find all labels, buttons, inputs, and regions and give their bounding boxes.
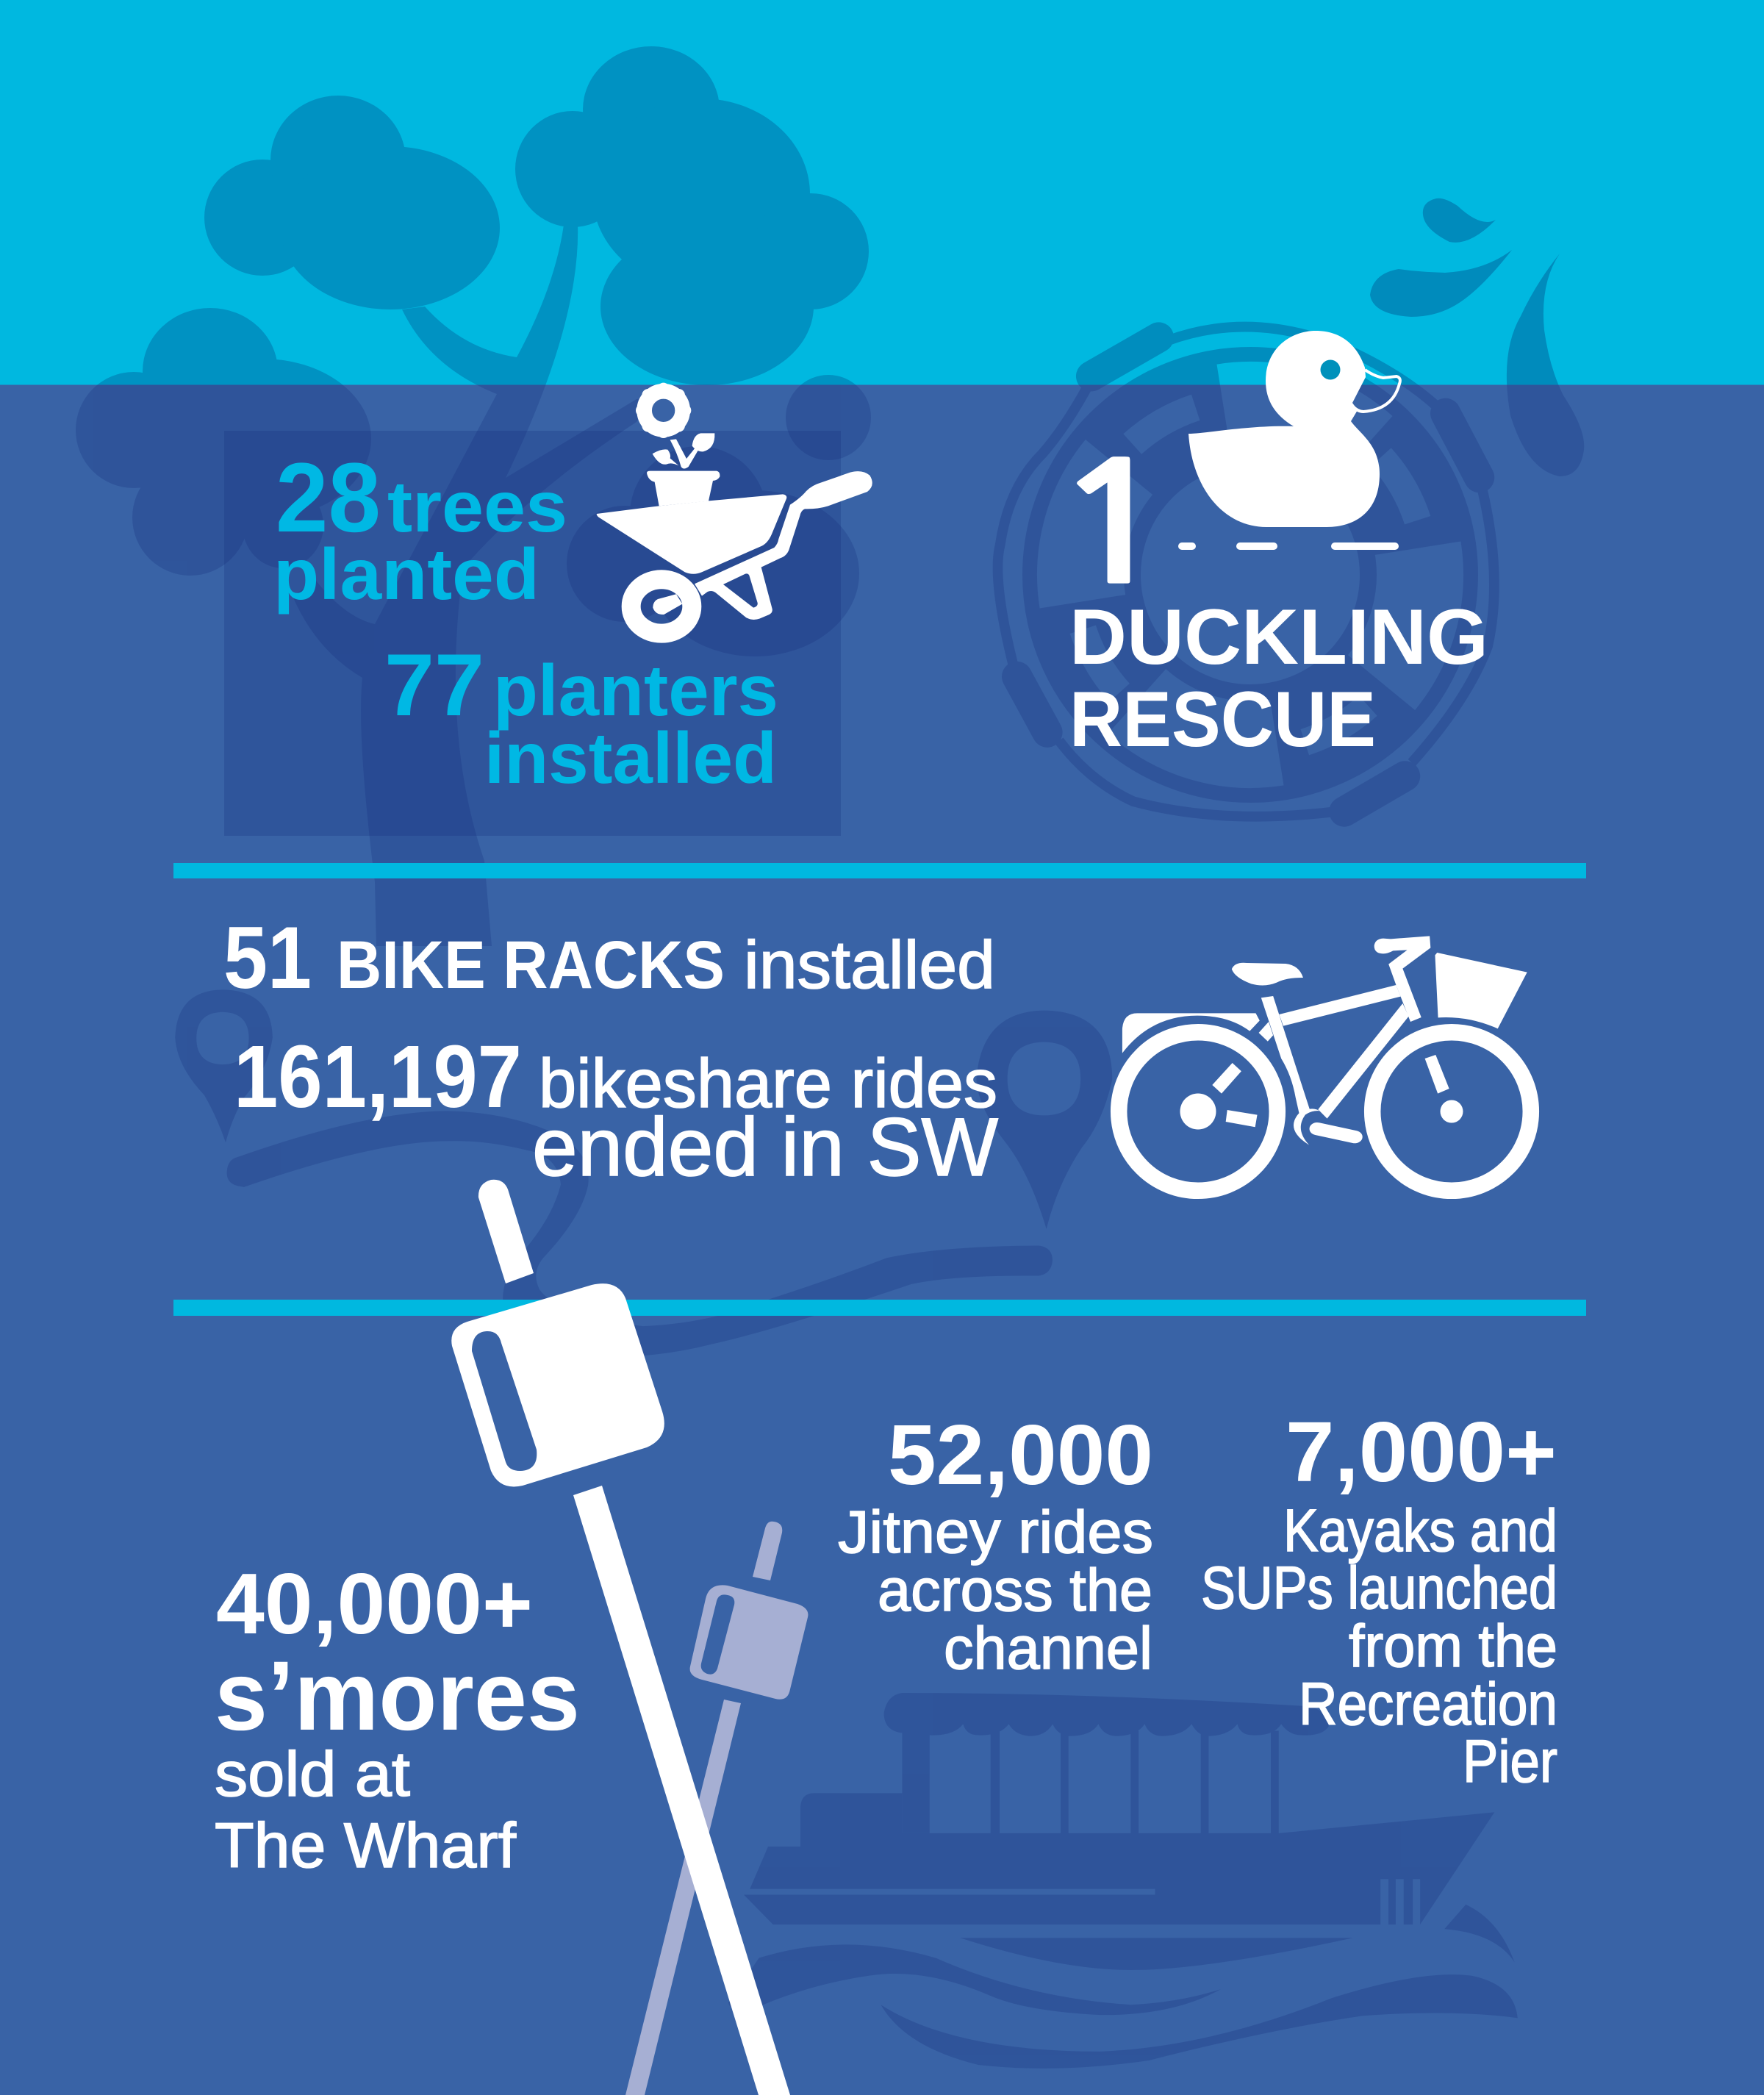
stat: 7,000+ kayaks and SUPs launched from the Recreation Pier: SUPs launched bbox=[1201, 1555, 1557, 1622]
stat: 77 planters installed bbox=[384, 636, 778, 798]
stat: 51 bike racks installed bbox=[223, 909, 995, 1007]
stat: 77 planters installed: planters bbox=[493, 650, 778, 731]
illustration: tree silhouette bbox=[76, 46, 871, 946]
divider: upper cyan bar bbox=[173, 863, 1586, 878]
stat: 28 trees planted: 28 bbox=[276, 443, 381, 553]
stat: 161,197 bikeshare rides ended in SW bbox=[234, 1026, 998, 1193]
stat: 51 bike racks installed: 51 bbox=[223, 909, 312, 1007]
stat: 7,000+ kayaks and SUPs launched from the Recreation Pier: Pier bbox=[1463, 1728, 1557, 1795]
stat: 161,197 bikeshare rides ended in SW: ended in SW bbox=[532, 1101, 998, 1193]
illustration: map pins and route silhouette bbox=[175, 989, 1112, 1358]
illustration: water splash drops bbox=[1370, 198, 1584, 476]
stat: 1 duckling rescue: RESCUE bbox=[1069, 675, 1376, 763]
background: cyan sky band bbox=[0, 0, 1764, 385]
stat: 52,000 Jitney rides across the channel: across the bbox=[878, 1557, 1152, 1624]
stat: 7,000+ kayaks and SUPs launched from the Recreation Pier: 7,000+ bbox=[1286, 1404, 1557, 1500]
stat: 51 bike racks installed: installed bbox=[744, 928, 995, 1003]
stat: 51 bike racks installed: BIKE RACKS bbox=[337, 928, 725, 1003]
stat: 1 duckling rescue bbox=[1050, 443, 1488, 763]
stat: 161,197 bikeshare rides ended in SW: 161,197 bbox=[234, 1026, 522, 1126]
stat: 161,197 bikeshare rides ended in SW: bikeshare rides bbox=[539, 1045, 997, 1122]
stat: 52,000 Jitney rides across the channel: Jitney rides bbox=[838, 1499, 1153, 1566]
stat: 7,000+ kayaks and SUPs launched from the Recreation Pier: Kayaks and bbox=[1283, 1497, 1557, 1564]
stat: 40,000+ s'mores sold at The Wharf: sold at bbox=[215, 1739, 410, 1810]
stat: 7,000+ kayaks and SUPs launched from the Recreation Pier bbox=[1201, 1404, 1557, 1795]
stat: 40,000+ s'mores sold at The Wharf: 40,000+ bbox=[216, 1555, 533, 1652]
stat: 7,000+ kayaks and SUPs launched from the Recreation Pier: from the bbox=[1349, 1613, 1557, 1680]
stat: 1 duckling rescue: 1 bbox=[1050, 443, 1178, 608]
stat: 1 duckling rescue: DUCKLING bbox=[1069, 592, 1488, 681]
stat: 28 trees planted: planted bbox=[273, 534, 539, 615]
icon: small marshmallow on stick bbox=[625, 1522, 808, 2095]
illustration: life ring silhouette bbox=[997, 327, 1494, 817]
stat: 28 trees planted: trees bbox=[387, 466, 567, 547]
illustration: jitney boat and waves silhouette bbox=[728, 1693, 1518, 2069]
stat: 40,000+ s'mores sold at The Wharf: s’mores bbox=[215, 1641, 580, 1751]
stat: 52,000 Jitney rides across the channel bbox=[838, 1407, 1153, 1682]
stat: 40,000+ s'mores sold at The Wharf bbox=[215, 1555, 580, 1881]
icon: large marshmallow on stick bbox=[451, 1180, 790, 2095]
stat: 77 planters installed: installed bbox=[484, 717, 777, 798]
stat: 77 planters installed: 77 bbox=[384, 636, 484, 734]
stat: 7,000+ kayaks and SUPs launched from the Recreation Pier: Recreation bbox=[1299, 1671, 1557, 1738]
panel: trees and planters backdrop bbox=[224, 431, 841, 836]
divider: lower cyan bar bbox=[173, 1300, 1586, 1316]
icon: wheelbarrow with potted flower bbox=[597, 383, 872, 634]
stat: 52,000 Jitney rides across the channel: 52,000 bbox=[888, 1407, 1153, 1503]
icon: rubber duck bbox=[1178, 331, 1400, 550]
stat: 40,000+ s'mores sold at The Wharf: The Wharf bbox=[215, 1811, 517, 1881]
stat: 52,000 Jitney rides across the channel: channel bbox=[944, 1615, 1152, 1682]
icon: bicycle with basket bbox=[1119, 936, 1531, 1191]
stat: 28 trees planted bbox=[273, 443, 567, 615]
